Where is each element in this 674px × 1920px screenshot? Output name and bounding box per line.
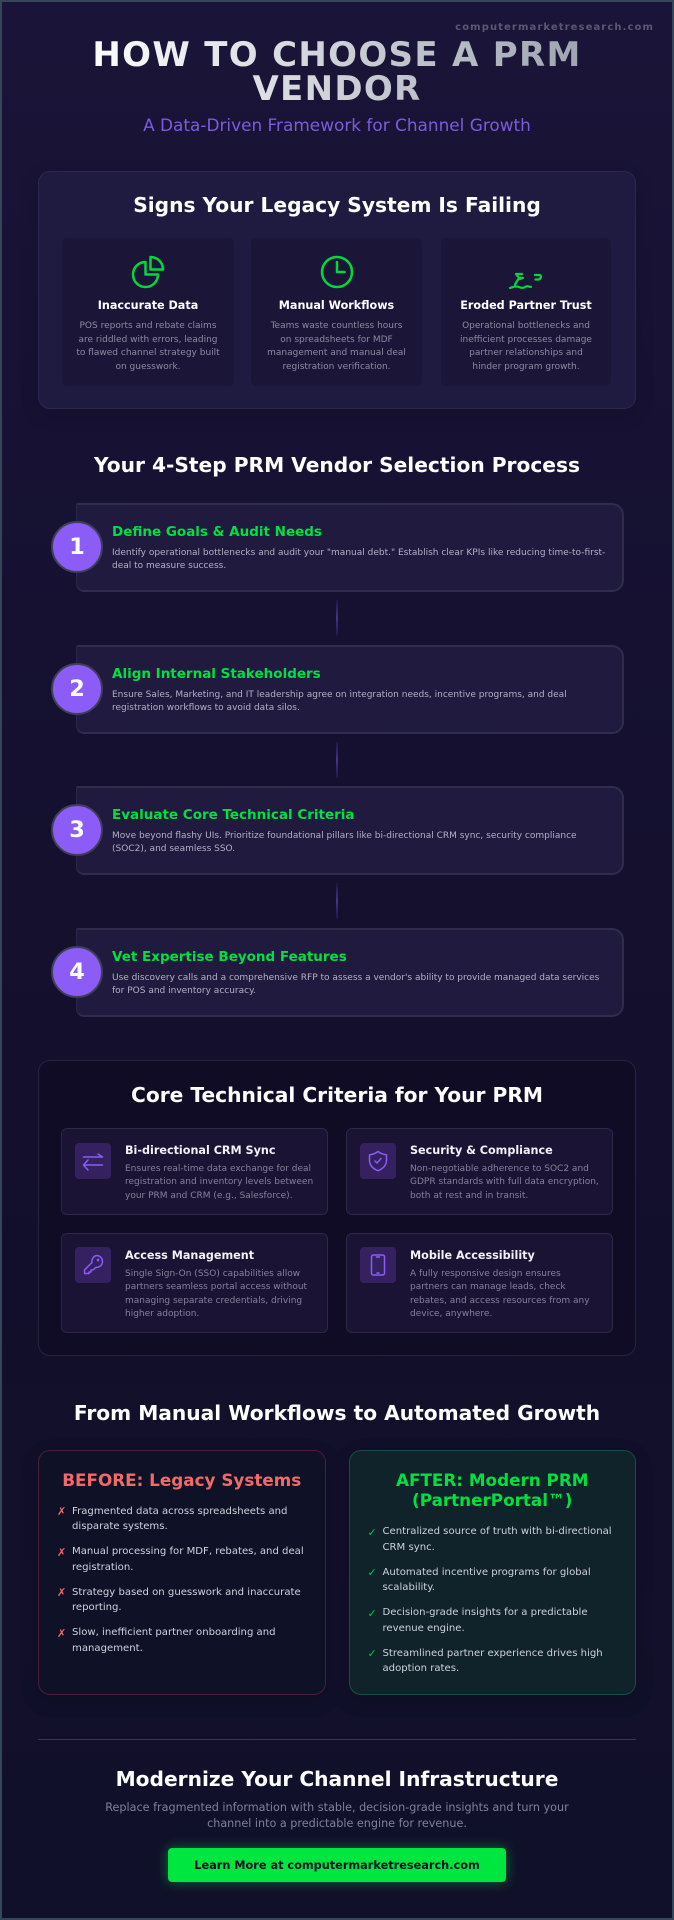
card: manual workflows: management and manual deal xyxy=(267,348,406,358)
card: access management: Access Management xyxy=(125,1249,254,1262)
panel: before legacy systems xyxy=(38,1450,326,1695)
after heading xyxy=(396,1470,588,1510)
closing text xyxy=(105,1801,569,1830)
icon: phone xyxy=(360,1247,396,1283)
card: manual workflows: registration verification. xyxy=(282,362,391,372)
after list: adoption rates. xyxy=(382,1663,459,1674)
step 2 xyxy=(76,645,624,734)
before list: Strategy based on guesswork and inaccurate xyxy=(72,1586,301,1598)
before list: reporting. xyxy=(72,1602,122,1613)
card: mobile accessibility xyxy=(346,1233,613,1333)
step 4 xyxy=(76,928,624,1017)
card: bi-directional CRM sync: your PRM and CRM (e.g., Salesforce). xyxy=(125,1190,293,1200)
title: VENDOR xyxy=(252,68,422,108)
before list: disparate systems. xyxy=(72,1521,168,1532)
after list: Decision-grade insights for a predictable xyxy=(382,1607,588,1618)
card: inaccurate data: POS reports and rebate claims xyxy=(79,321,217,331)
card: security and compliance: Non-negotiable adherence to SOC2 and xyxy=(410,1164,589,1174)
card: inaccurate data: to flawed channel strategy built xyxy=(76,348,220,358)
step number 4 xyxy=(51,946,103,998)
icon: broken handshake xyxy=(508,272,542,290)
card: access management xyxy=(61,1233,328,1333)
before heading: BEFORE: Legacy Systems xyxy=(62,1470,301,1490)
panel: signs your legacy system is failing xyxy=(38,171,636,409)
step 2: registration workflows to avoid data silos. xyxy=(112,703,300,713)
step number 3: 3 xyxy=(69,817,85,843)
before list xyxy=(57,1505,304,1654)
card: eroded partner trust: Operational bottlenecks and xyxy=(462,321,590,331)
step 1: Identify operational bottlenecks and audit your "manual debt." Establish clear KPIs like reducing time-to-first- xyxy=(112,548,605,558)
title: HOW TO CHOOSE A PRM xyxy=(92,34,582,74)
card: eroded partner trust: Eroded Partner Trust xyxy=(460,299,592,312)
after heading: AFTER: Modern PRM xyxy=(396,1470,588,1490)
card: bi-directional CRM sync: Bi-directional CRM Sync xyxy=(125,1144,276,1157)
after list: Centralized source of truth with bi-directional xyxy=(382,1526,612,1537)
step 4: Use discovery calls and a comprehensive RFP to assess a vendor's ability to provide managed data services xyxy=(112,972,599,982)
after list: CRM sync. xyxy=(382,1542,435,1553)
icon: clock xyxy=(320,256,354,288)
heading: modernize: Modernize Your Channel Infrastructure xyxy=(116,1766,558,1790)
connector 1 xyxy=(336,600,338,636)
card: manual workflows: Teams waste countless hours xyxy=(271,321,402,331)
before list: ✗ xyxy=(57,1505,66,1518)
after list: ✓ xyxy=(368,1607,377,1620)
card: security and compliance: GDPR standards with full data encryption, xyxy=(410,1177,599,1187)
step 3: Move beyond flashy UIs. Prioritize foundational pillars like bi-directional CRM sync, security compliance xyxy=(112,830,577,840)
card: eroded partner trust: partner relationships and xyxy=(469,348,583,358)
after list: ✓ xyxy=(368,1566,377,1579)
step 1: Define Goals & Audit Needs xyxy=(112,524,322,540)
card: bi-directional CRM sync: Ensures real-time data exchange for deal xyxy=(125,1164,311,1174)
closing text: channel into a predictable engine for revenue. xyxy=(207,1817,467,1830)
card: inaccurate data: on guesswork. xyxy=(115,362,181,372)
subtitle: A Data-Driven Framework for Channel Growth xyxy=(143,114,531,134)
card: access management: partners seamless portal access without xyxy=(125,1282,307,1292)
closing text: Replace fragmented information with stable, decision-grade insights and turn your xyxy=(105,1801,569,1814)
before list: ✗ xyxy=(57,1546,66,1559)
before list: Slow, inefficient partner onboarding and xyxy=(72,1627,276,1638)
before list: registration. xyxy=(72,1562,133,1573)
card: eroded partner trust: hinder program growth. xyxy=(472,362,580,372)
icon: arrows xyxy=(75,1143,111,1179)
after heading: (PartnerPortal™) xyxy=(412,1490,572,1510)
after list: Streamlined partner experience drives high xyxy=(382,1648,603,1658)
card: eroded partner trust: inefficient processes damage xyxy=(460,334,592,344)
title xyxy=(80,38,594,106)
step 1 xyxy=(76,503,624,592)
connector 3 xyxy=(336,883,338,919)
step 3 xyxy=(76,786,624,875)
button: learn more: Learn More at computermarketresearch.com xyxy=(194,1859,480,1872)
panel: core technical criteria xyxy=(38,1060,636,1356)
card: inaccurate data xyxy=(62,238,234,386)
card: manual workflows: on spreadsheets for MDF xyxy=(280,334,393,344)
step number 3 xyxy=(51,804,103,856)
panel: after modern PRM xyxy=(348,1450,636,1695)
card: mobile accessibility: A fully responsive design ensures xyxy=(410,1268,561,1278)
watermark: computermarketresearch.com xyxy=(455,22,654,33)
card: mobile accessibility: Mobile Accessibility xyxy=(410,1249,535,1262)
after list: ✓ xyxy=(368,1526,377,1539)
heading: 4-step process: Your 4-Step PRM Vendor Selection Process xyxy=(94,453,580,477)
step 4: for POS and inventory accuracy. xyxy=(112,986,256,996)
card: manual workflows: Manual Workflows xyxy=(279,299,394,312)
after list: Automated incentive programs for global xyxy=(382,1566,591,1578)
after list xyxy=(368,1526,612,1674)
before list: Fragmented data across spreadsheets and xyxy=(72,1506,287,1516)
before list: ✗ xyxy=(57,1627,66,1640)
before list: management. xyxy=(72,1643,143,1654)
icon: pie chart xyxy=(132,256,164,288)
before list: ✗ xyxy=(57,1586,66,1599)
step number 2 xyxy=(51,663,103,715)
step number 2: 2 xyxy=(69,676,85,702)
step number 4: 4 xyxy=(69,959,85,985)
divider xyxy=(38,1739,636,1740)
after list: ✓ xyxy=(368,1647,377,1660)
connector 2 xyxy=(336,742,338,778)
card: security and compliance: both at rest and in transit. xyxy=(410,1190,528,1200)
card: access management: managing separate credentials, driving xyxy=(125,1296,302,1306)
step 4: Vet Expertise Beyond Features xyxy=(112,949,347,965)
step number 1 xyxy=(51,521,103,573)
before list: Manual processing for MDF, rebates, and deal xyxy=(72,1546,304,1557)
card: security and compliance xyxy=(346,1128,613,1215)
heading: core technical criteria: Core Technical Criteria for Your PRM xyxy=(131,1083,543,1107)
card: eroded partner trust xyxy=(441,238,611,386)
step number 1: 1 xyxy=(69,534,85,560)
card: mobile accessibility: partners can manage leads, check xyxy=(410,1282,566,1292)
button: learn more xyxy=(168,1848,506,1882)
card: access management: Single Sign-On (SSO) capabilities allow xyxy=(125,1268,300,1278)
card: mobile accessibility: device, anywhere. xyxy=(410,1309,492,1319)
card: mobile accessibility: rebates, and access resources from any xyxy=(410,1296,590,1306)
step 2: Ensure Sales, Marketing, and IT leadership agree on integration needs, incentive programs, and deal xyxy=(112,690,567,700)
after list: scalability. xyxy=(382,1582,435,1593)
card: bi-directional CRM sync xyxy=(61,1128,328,1215)
step 1: deal to measure success. xyxy=(112,561,226,571)
heading: signs: Signs Your Legacy System Is Failing xyxy=(133,193,541,217)
card: access management: higher adoption. xyxy=(125,1309,199,1319)
card: inaccurate data: are riddled with errors, leading xyxy=(78,334,218,344)
card: inaccurate data: Inaccurate Data xyxy=(98,299,198,312)
card: bi-directional CRM sync: registration and inventory levels between xyxy=(125,1177,313,1187)
icon: shield xyxy=(360,1143,396,1179)
heading: manual to automated: From Manual Workflows to Automated Growth xyxy=(74,1400,600,1424)
step 3: Evaluate Core Technical Criteria xyxy=(112,807,355,823)
card: security and compliance: Security & Compliance xyxy=(410,1144,553,1157)
after list: revenue engine. xyxy=(382,1623,465,1634)
card: manual workflows xyxy=(251,238,422,386)
step 2: Align Internal Stakeholders xyxy=(112,666,321,682)
icon: key xyxy=(75,1247,111,1283)
step 3: (SOC2), and seamless SSO. xyxy=(112,844,235,854)
